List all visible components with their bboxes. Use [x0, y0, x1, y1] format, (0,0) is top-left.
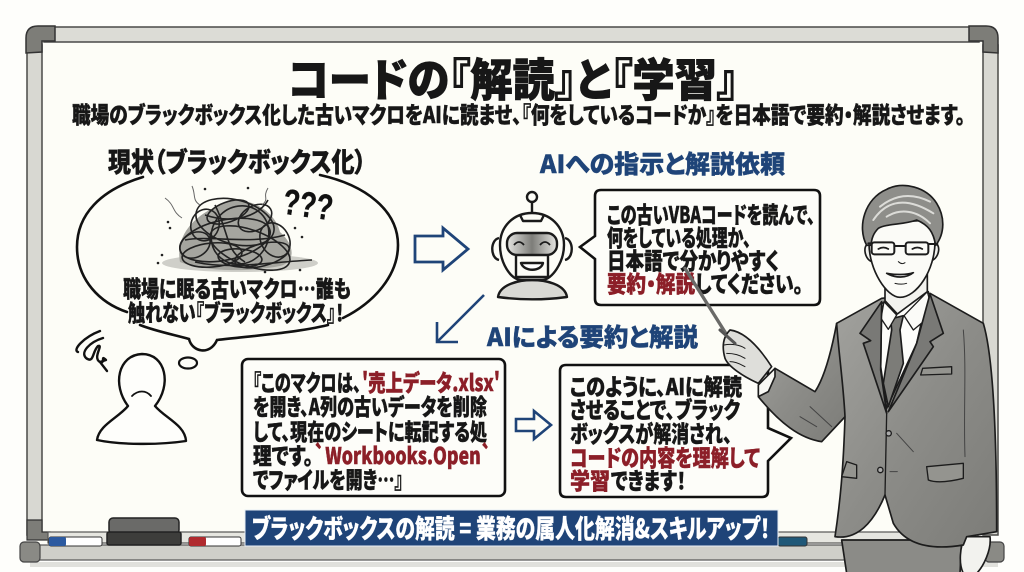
summary line 1: 『このマクロは、	[253, 364, 361, 398]
icon: tangled code	[157, 186, 318, 279]
face	[869, 220, 935, 297]
prompt line 4 black: してください。	[695, 265, 803, 299]
prompt line 1: この古いVBAコードを読んで、	[607, 196, 815, 230]
arrow: to AI	[415, 228, 468, 270]
hair strands	[873, 196, 933, 223]
panel: current state	[76, 141, 398, 444]
fingers	[724, 344, 745, 367]
summary line 1 red: '売上データ.xlsx'	[362, 364, 500, 398]
shirt cuff	[758, 368, 775, 397]
bubble text line 1: 職場に眠る古いマクロ…誰も	[123, 270, 351, 304]
dark blue marker	[778, 537, 807, 546]
icon: robot	[492, 192, 572, 299]
conclusion line 2: させることで、ブラック	[570, 391, 741, 425]
panel: AI summary box	[242, 359, 505, 496]
banner text: ブラックボックスの解読 = 業務の属人化解消&スキルアップ！	[252, 509, 770, 546]
pocket details	[842, 367, 963, 482]
hair	[862, 186, 943, 245]
prompt line 4 red: 要約・解説	[607, 265, 695, 299]
prompt line 3: 日本語で分かりやすく	[607, 242, 779, 276]
question marks: ???	[280, 181, 336, 228]
summary line 4 red: `Workbooks.Open`	[314, 437, 492, 471]
collar	[881, 292, 933, 330]
speech bubble	[580, 190, 820, 305]
sleeve arm	[758, 323, 847, 442]
pointer grip	[720, 330, 735, 343]
title: コードの『解読』と『学習』	[288, 44, 738, 109]
heading: AI instruction: AIへの指示と解説依頼	[539, 145, 785, 181]
conclusion line 1: このように、AIに解読	[570, 368, 742, 402]
prompt line 2: 何をしている処理か、	[607, 219, 751, 253]
banner	[245, 509, 778, 546]
heading: AI summary: AIによる要約と解説	[486, 318, 698, 354]
speech bubble	[560, 365, 791, 497]
heading: current state: 現状（ブラックボックス化）	[108, 141, 366, 180]
eraser	[107, 518, 181, 545]
right hand	[723, 330, 772, 383]
trousers	[842, 540, 962, 572]
bubble text line 2: 触れない『ブラックボックス』！	[128, 294, 344, 328]
summary line 2: を開き、A列の古いデータを削除	[253, 388, 487, 422]
jacket	[835, 293, 997, 547]
illustration: presenter	[685, 186, 997, 572]
summary line 5: でファイルを開き…』	[253, 461, 403, 495]
conclusion line 3: ボックスが解消され、	[570, 415, 732, 449]
ears	[865, 244, 939, 262]
box	[242, 359, 505, 496]
conclusion line 4 red: コードの内容を理解して	[570, 439, 760, 473]
left hand	[960, 537, 990, 572]
buttons	[885, 413, 887, 495]
conclusion line 5 red: 学習	[570, 462, 610, 496]
pointer	[685, 268, 730, 340]
panel: AI prompt	[580, 190, 820, 305]
icon: worried person	[97, 354, 186, 444]
eyes	[878, 247, 922, 249]
thought bubble	[77, 175, 398, 368]
blue marker	[49, 537, 102, 546]
panel: conclusion	[560, 365, 791, 497]
glasses	[868, 242, 937, 254]
tie	[883, 316, 903, 407]
lapels	[860, 294, 943, 413]
summary line 3: して、現在のシートに転記する処	[253, 413, 487, 447]
arrow: to summary	[437, 295, 484, 342]
red marker	[189, 537, 241, 546]
neck	[885, 273, 927, 314]
nose and mouth	[898, 262, 905, 264]
shirt	[881, 292, 928, 408]
arrow: to conclusion	[516, 411, 551, 439]
summary line 4: 理です。	[253, 437, 313, 471]
conclusion line 5 black: できます！	[611, 462, 686, 496]
fold lines	[800, 330, 965, 472]
icon: worry squiggle	[76, 331, 107, 371]
marker tray	[20, 532, 1004, 567]
